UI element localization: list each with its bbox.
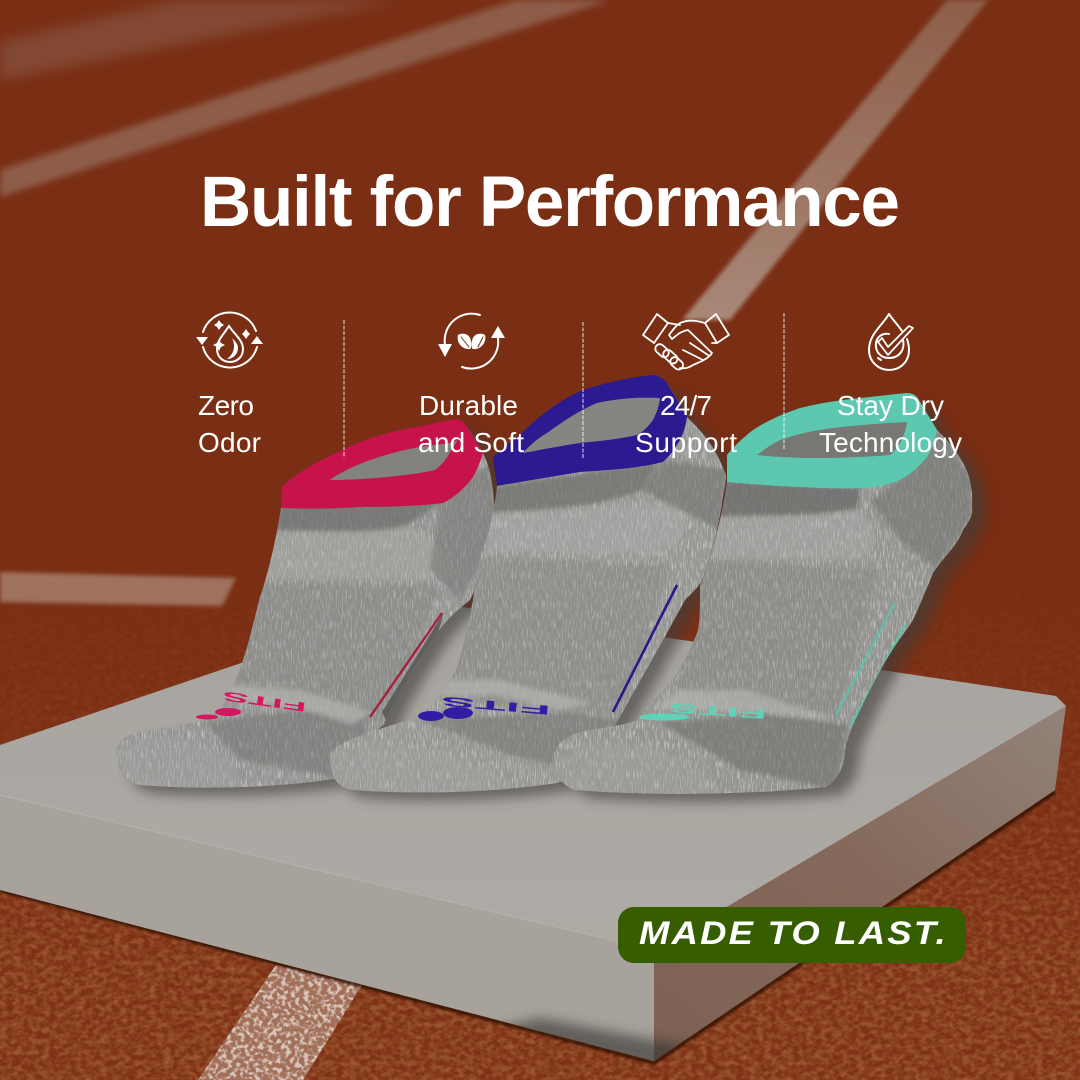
- socks: three ankle socks: [116, 375, 972, 798]
- sock cuff: teal band: [727, 393, 937, 488]
- sock shadows: [128, 391, 986, 802]
- icon: handshake: [643, 314, 729, 371]
- track line: upper left diagonal: [0, 0, 610, 197]
- label: Stay Dry Technology: [819, 390, 962, 458]
- feature: 24/7 Support: [635, 314, 737, 458]
- divider 2: [582, 322, 584, 458]
- title: Built for Performance: [200, 163, 900, 242]
- track line: horizontal left: [0, 572, 236, 606]
- track line: right diagonal: [682, 0, 988, 320]
- track line: faint far diagonal: [0, 0, 400, 80]
- icon: water drop with check mark: [869, 314, 913, 370]
- icon: odor-free drop with sparkles: [196, 313, 263, 368]
- platform top face: [0, 601, 1066, 950]
- label: Stay Dry Technology: Stay Dry: [837, 390, 944, 421]
- feature: Stay Dry Technology: [819, 314, 962, 458]
- label: Durable and Soft: Durable: [419, 390, 518, 421]
- label: Zero Odor: [198, 390, 261, 458]
- platform corner shade: [500, 1012, 685, 1061]
- platform side right: [654, 706, 1066, 1061]
- sock logo: red: FITS: [222, 688, 307, 714]
- platform: white block: [0, 601, 1066, 1080]
- sock logo: teal: FITS: [668, 700, 767, 721]
- feature: Zero Odor: [196, 313, 263, 458]
- label: Stay Dry Technology: Technology: [819, 427, 962, 458]
- label: Zero Odor: Zero: [198, 390, 254, 421]
- label: 24/7 Support: Support: [635, 427, 737, 458]
- label: Zero Odor: Odor: [198, 427, 261, 458]
- sock: red: [116, 419, 495, 790]
- badge: Made to last: MADE TO LAST.: [639, 916, 946, 951]
- badge: Made to last: [618, 907, 966, 963]
- icon: recycling arrows with leaves: [438, 314, 505, 369]
- label: 24/7 Support: 24/7: [660, 390, 712, 421]
- label: Durable and Soft: and Soft: [418, 427, 524, 458]
- sock logo: blue: FITS: [441, 694, 551, 718]
- divider 1: [343, 320, 345, 458]
- feature: Durable and Soft: [418, 314, 524, 458]
- sock cuff: red band: [281, 419, 483, 509]
- sock: teal: [552, 393, 972, 798]
- sock logo: red: [196, 688, 307, 720]
- track line: bottom foreground: [198, 965, 362, 1080]
- sock: blue: [330, 375, 727, 795]
- platform side left: [0, 795, 654, 1061]
- label: Durable and Soft: [418, 390, 524, 458]
- sock cuff: blue band: [493, 375, 687, 486]
- divider 3: [783, 313, 785, 450]
- label: 24/7 Support: [635, 390, 737, 458]
